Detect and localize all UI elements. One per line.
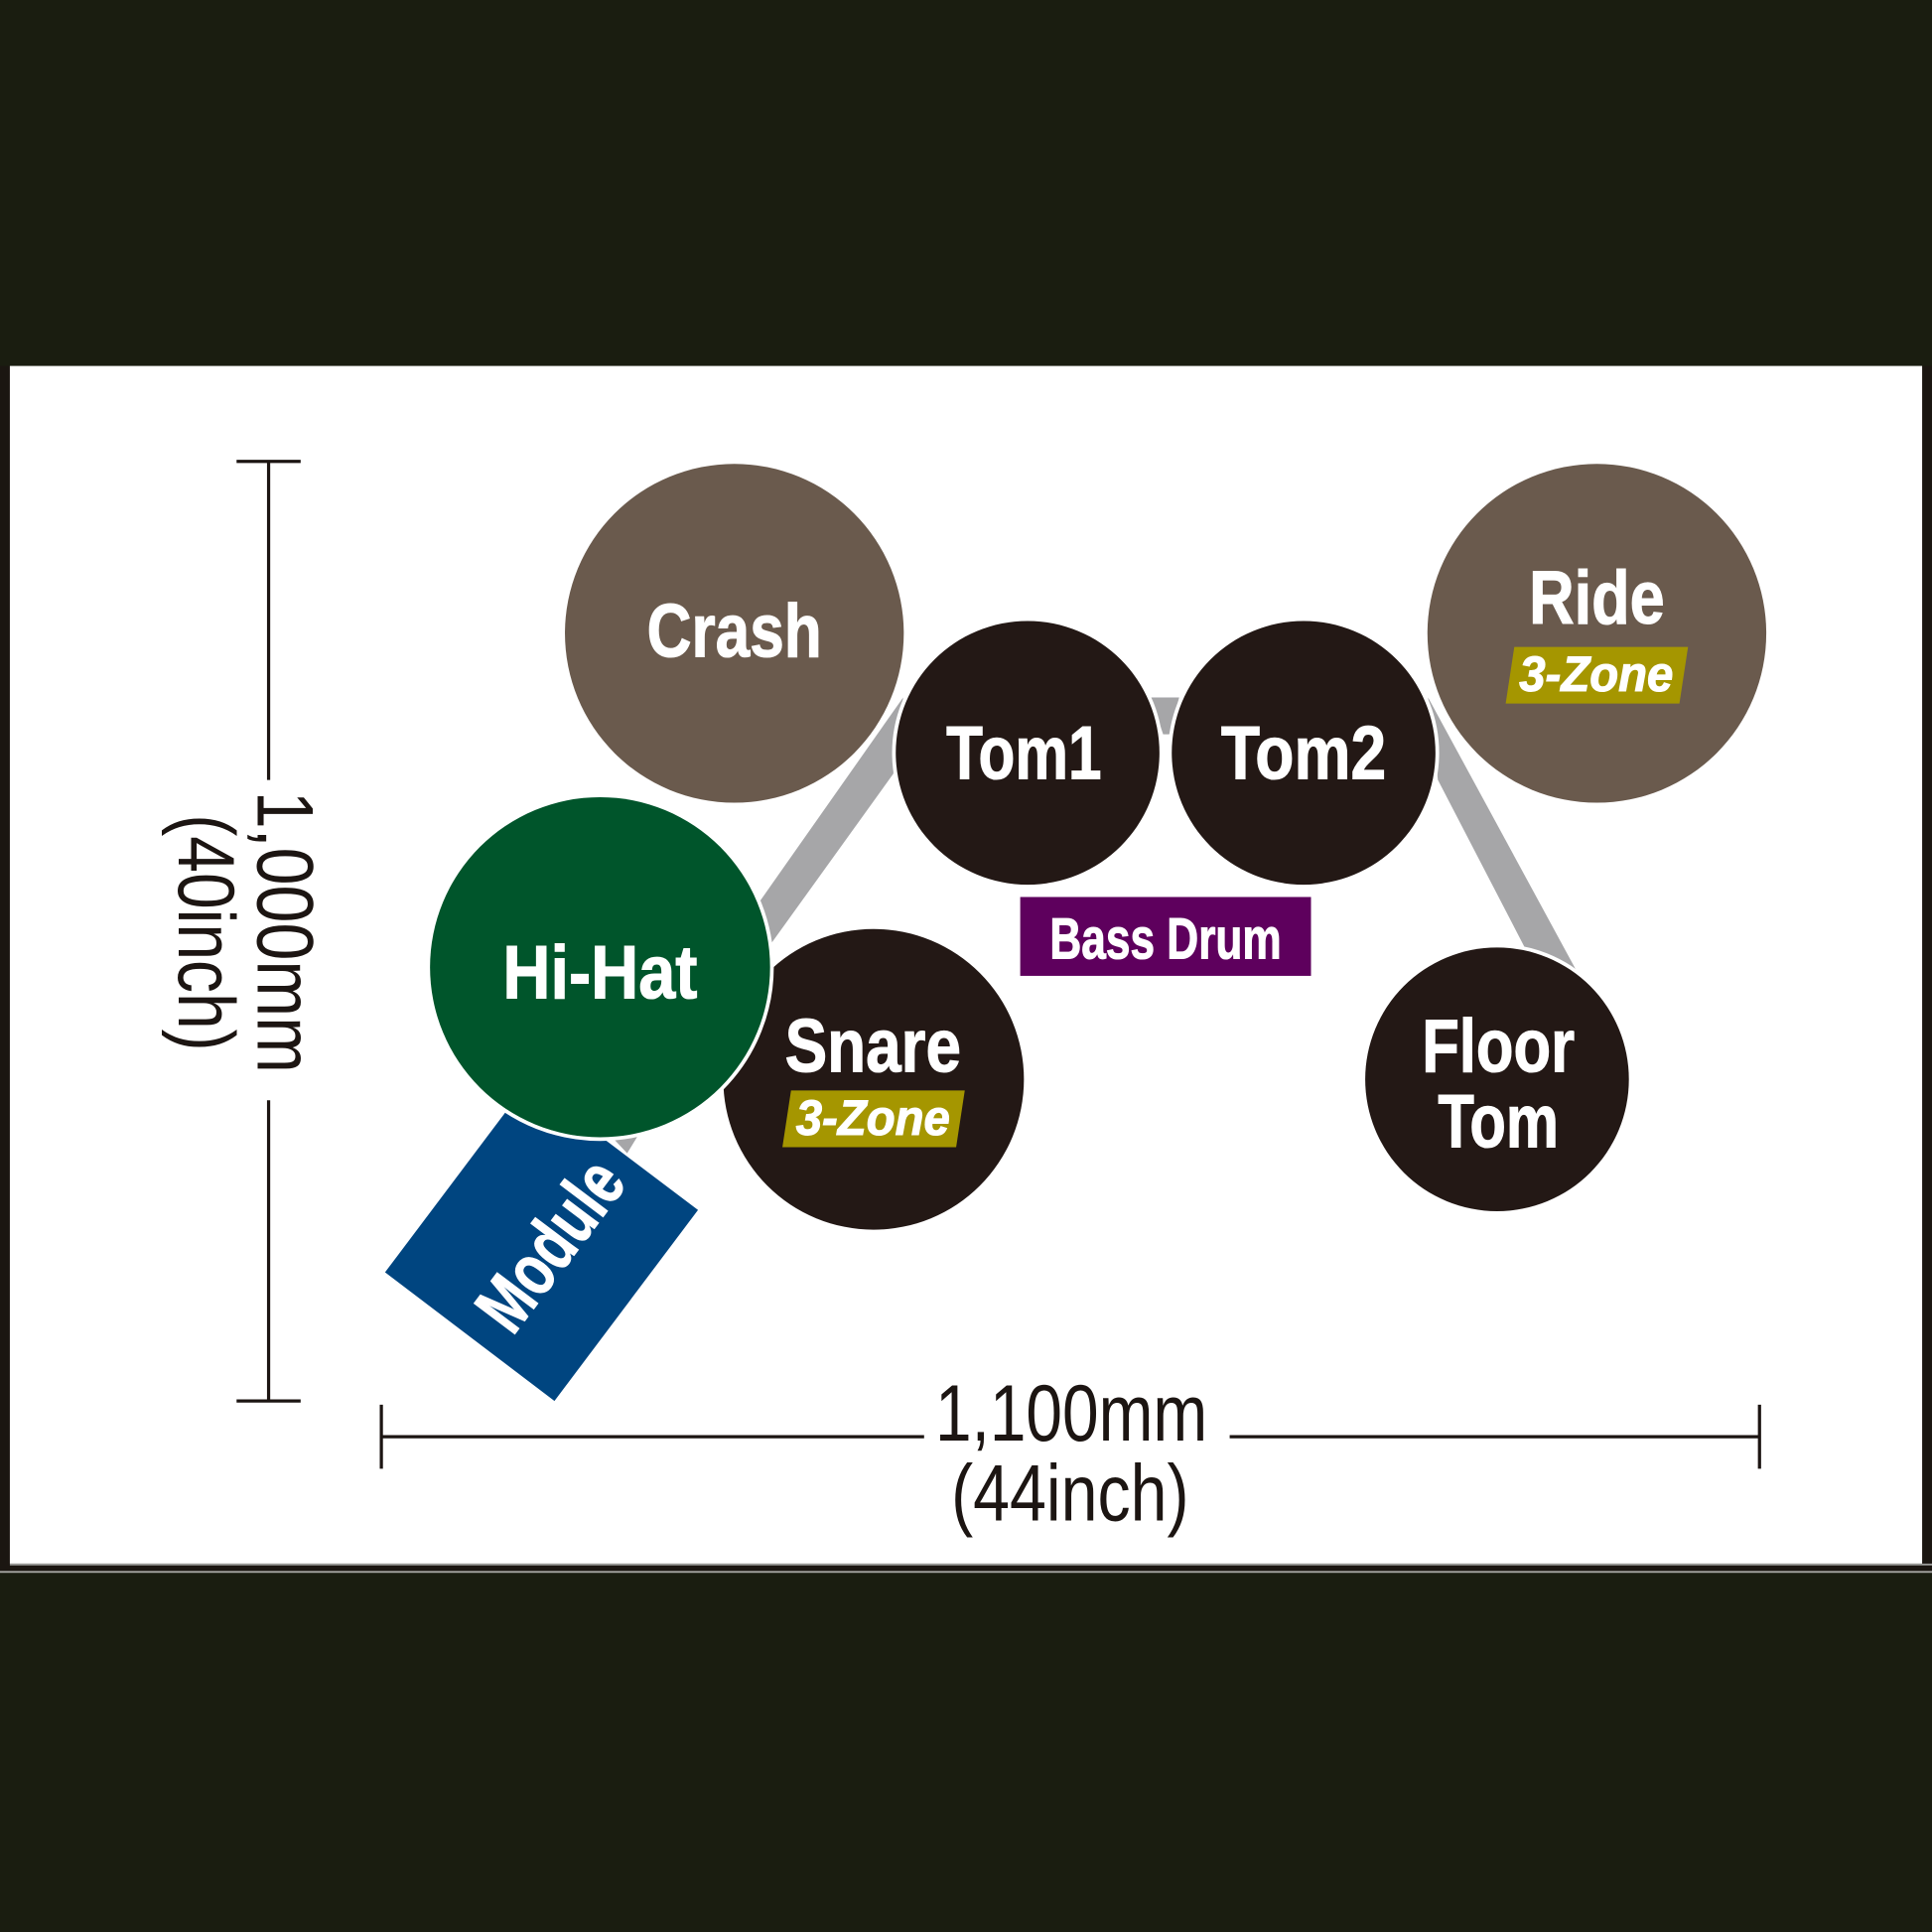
pad: snare <box>724 929 1024 1230</box>
dimension: width line <box>381 1405 1759 1468</box>
pad: tom 2 <box>1172 621 1436 885</box>
pad: hi-hat <box>430 797 770 1138</box>
pad: tom 1: Tom1 <box>946 711 1102 795</box>
dimension: width label <box>935 1369 1207 1538</box>
pad: tom 2: Tom2 <box>1221 711 1386 795</box>
dimension: depth label: 1,000mm <box>239 791 329 1073</box>
panel: white diagram background <box>10 366 1922 1564</box>
label: bass drum <box>1021 897 1311 976</box>
dimension: depth label <box>161 791 329 1073</box>
dimension: width label: 1,100mm <box>935 1369 1207 1458</box>
pad: crash <box>565 464 903 803</box>
badge: snare 3-zone: 3-Zone <box>796 1090 950 1146</box>
module box <box>385 1082 698 1401</box>
label: bass drum: Bass Drum <box>1049 907 1282 972</box>
pad: floor tom: Floor <box>1422 1005 1575 1089</box>
arm: tom2 to floor tom <box>1428 697 1576 970</box>
dimension: depth label: (40inch) <box>161 814 250 1051</box>
arm: hi-hat to module <box>609 1131 640 1154</box>
pad: tom 1 <box>896 621 1160 885</box>
dimension: width label: (44inch) <box>951 1449 1189 1538</box>
arm: hi-hat to tom1 <box>760 697 903 945</box>
panel: dark frame edge <box>0 366 1932 1573</box>
pad: floor tom <box>1365 947 1629 1211</box>
pad: ride <box>1428 464 1766 803</box>
badge: ride 3-zone: 3-Zone <box>1519 646 1673 702</box>
pad: ride: Ride <box>1529 556 1665 640</box>
arm: tom1 to tom2 <box>1151 697 1179 735</box>
pad: floor tom: Tom <box>1438 1079 1559 1164</box>
pad: crash: Crash <box>647 589 822 673</box>
dimension: depth line <box>236 462 301 1401</box>
pad: snare: Snare <box>785 1005 961 1089</box>
module box: Module <box>460 1144 641 1346</box>
pad: hi-hat: Hi-Hat <box>502 930 697 1015</box>
